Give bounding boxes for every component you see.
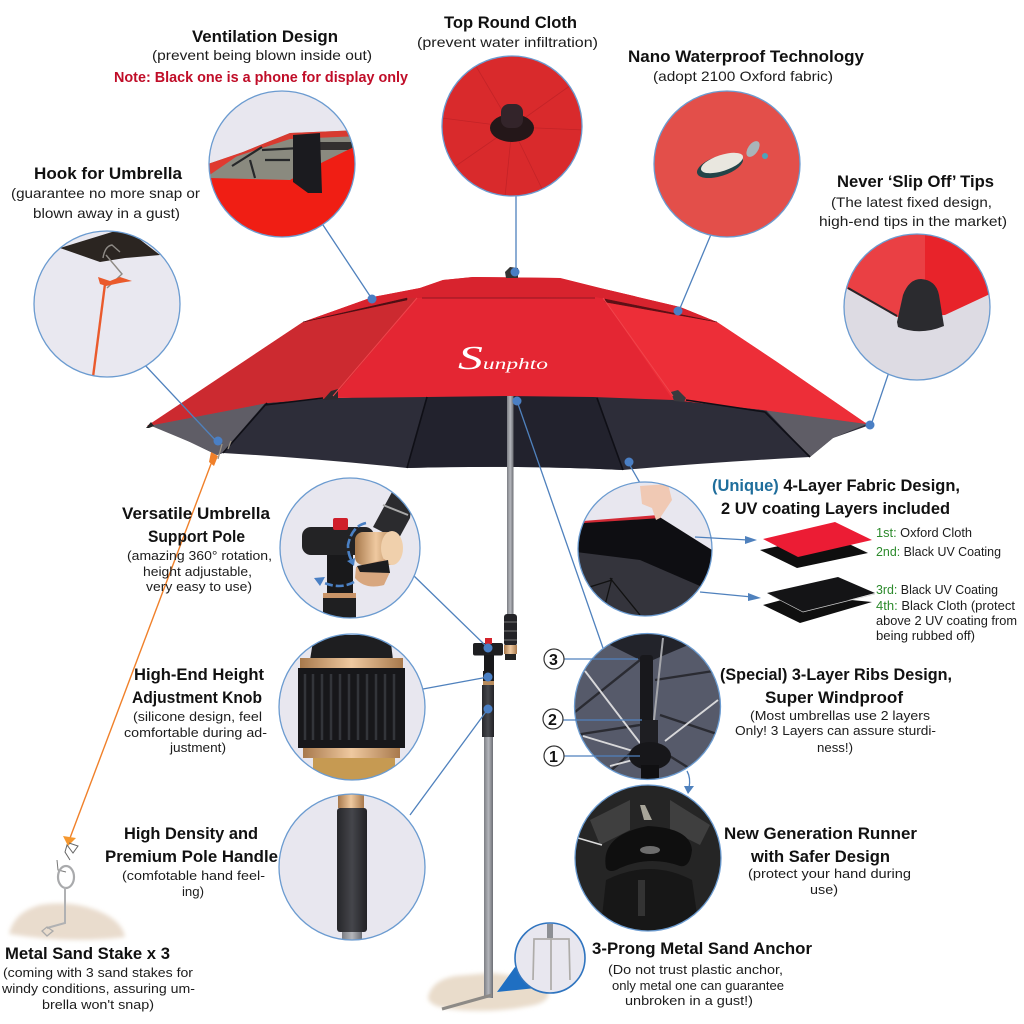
- text: nano waterproof technology: [628, 48, 865, 84]
- panel: ventilation detail: [210, 92, 354, 236]
- text: height adjustment knob: [124, 666, 267, 755]
- underside: centre panel: [407, 395, 623, 470]
- text: ribs design: Super Windproof: [765, 689, 904, 707]
- leader lines: [143, 196, 889, 815]
- panel: fabric layers photo: [575, 480, 715, 620]
- arrow: ribs to runner: [684, 771, 694, 794]
- upper pole: [507, 396, 514, 616]
- text: versatile support pole: (amazing 360° rotation,: [127, 549, 272, 563]
- text: nano waterproof technology: (adopt 2100 Oxford fabric): [653, 68, 833, 84]
- text: layer legend: 2nd: Black UV Coating: [876, 545, 1001, 559]
- lower pole: [484, 737, 493, 1000]
- stake hook on rib: [218, 441, 231, 459]
- panel: tip detail: [844, 234, 990, 380]
- height knob: [483, 671, 494, 683]
- arrow: orange rope from umbrella to stake: [63, 452, 218, 846]
- panel: pole handle detail: [280, 794, 424, 940]
- top cloth circle outline: [442, 56, 582, 196]
- text: runner: New Generation Runner: [724, 825, 918, 843]
- gold joint: [504, 645, 517, 654]
- text: 4-layer fabric design: [712, 477, 960, 518]
- callouts: rib numbers: 2: [548, 712, 557, 729]
- text: pole handle: Premium Pole Handle: [105, 848, 278, 866]
- text: versatile support pole: height adjustable,: [143, 565, 252, 579]
- underside: right grey panel: [765, 409, 867, 457]
- rib tips: [323, 389, 338, 400]
- callouts: rib numbers: 3: [549, 652, 558, 669]
- text: versatile support pole: [122, 505, 272, 594]
- panel: hook detail: [34, 232, 180, 376]
- panel: nano waterproof: [654, 92, 800, 236]
- text: hook for umbrella: (guarantee no more snap or: [11, 185, 200, 201]
- underside: dark fabric: [149, 393, 867, 470]
- text: height adjustment knob: Adjustment Knob: [132, 689, 262, 707]
- arrows to fabric layers: [695, 536, 761, 601]
- runner circle outline: [575, 785, 721, 931]
- text: versatile support pole: Versatile Umbrella: [122, 505, 271, 523]
- text: layer legend: [876, 526, 1017, 643]
- text: hook for umbrella: [11, 165, 200, 221]
- text: hook for umbrella: blown away in a gust): [33, 205, 180, 221]
- red canopy silhouette: [147, 277, 867, 426]
- text: ribs design: ness!): [817, 741, 853, 755]
- rib lines: [223, 397, 810, 470]
- text: ventilation design: [114, 28, 408, 86]
- text: layer legend: above 2 UV coating from: [876, 614, 1017, 628]
- text: layer legend: 1st: Oxford Cloth: [876, 526, 972, 540]
- text: layer legend: being rubbed off): [876, 629, 975, 643]
- panel: sand anchor detail: [515, 923, 585, 993]
- icon: anchor pointer: [497, 967, 536, 992]
- top vent cap: [303, 277, 717, 322]
- umbrella pole and mechanism: [473, 396, 517, 1000]
- text: top round cloth: (prevent water infiltration): [417, 34, 598, 50]
- handle circle outline: [279, 794, 425, 940]
- rib folds on red: [333, 298, 673, 396]
- text: ribs design: (Most umbrellas use 2 layers: [750, 709, 930, 723]
- text: top round cloth: [417, 14, 598, 50]
- diagram: four fabric layers: [760, 522, 875, 623]
- ribs circle outline: [574, 634, 720, 780]
- text: nano waterproof technology: Nano Waterproof Technology: [628, 48, 865, 66]
- sand mound with anchor: [428, 960, 549, 1011]
- text: height adjustment knob: comfortable during ad-: [124, 726, 267, 740]
- icon: sand stake: [9, 843, 125, 940]
- panel: support pole detail: [278, 476, 423, 622]
- tip circle outline: [844, 234, 990, 380]
- text: sand anchor: 3-Prong Metal Sand Anchor: [592, 940, 813, 958]
- text: sand stake: (coming with 3 sand stakes for: [3, 966, 193, 980]
- text: height adjustment knob: justment): [169, 741, 226, 755]
- vent slits: [303, 298, 407, 322]
- panel: top round cloth: [440, 55, 585, 200]
- text: never slip off tips: high-end tips in the market): [819, 213, 1007, 229]
- hook circle outline: [34, 231, 180, 377]
- text: layer legend: 4th: Black Cloth (protect: [876, 599, 1016, 613]
- umbrella canopy: [146, 267, 867, 470]
- text: layer legend: 3rd: Black UV Coating: [876, 583, 998, 597]
- text: top round cloth: Top Round Cloth: [444, 14, 577, 32]
- callouts: rib numbers: [543, 649, 642, 766]
- nano circle outline: [654, 91, 800, 237]
- top grip: [504, 614, 517, 646]
- panel: runner detail: [576, 786, 720, 930]
- fabric circle outline: [578, 482, 712, 616]
- text: runner: with Safer Design: [750, 848, 890, 866]
- text: ventilation design: (prevent being blown inside out): [152, 47, 372, 63]
- text: sand stake: Metal Sand Stake x 3: [5, 945, 170, 963]
- text: runner: [724, 825, 918, 897]
- ventilation circle outline: [209, 91, 355, 237]
- text: 4-layer fabric design: (Unique) 4-Layer Fabric Design,: [712, 477, 960, 495]
- callouts: rib numbers: 1: [549, 749, 558, 766]
- text: ribs design: [720, 666, 952, 755]
- text: hook for umbrella: Hook for Umbrella: [34, 165, 183, 183]
- text: pole handle: ing): [182, 885, 204, 899]
- text: height adjustment knob: High-End Height: [134, 666, 265, 684]
- brand logo: S unphto: [458, 340, 548, 377]
- text: never slip off tips: (The latest fixed design,: [831, 194, 992, 210]
- text: ventilation design: Ventilation Design: [192, 28, 338, 46]
- text: sand stake: brella won't snap): [42, 998, 154, 1012]
- text: 4-layer fabric design: 2 UV coating Layers included: [721, 500, 950, 518]
- text: sand anchor: unbroken in a gust!): [625, 994, 753, 1008]
- text: ribs design: (Special) 3-Layer Ribs Design,: [720, 666, 952, 684]
- text: sand anchor: (Do not trust plastic anchor,: [608, 963, 783, 977]
- text: ribs design: Only! 3 Layers can assure sturdi-: [735, 724, 936, 738]
- text: sand stake: windy conditions, assuring um-: [1, 982, 195, 996]
- text: runner: use): [810, 883, 838, 897]
- red canopy left side: [147, 297, 417, 426]
- text: pole handle: [105, 825, 278, 899]
- text: versatile support pole: very easy to use): [146, 580, 252, 594]
- text: versatile support pole: Support Pole: [148, 528, 245, 546]
- text: pole handle: High Density and: [124, 825, 258, 843]
- panel: knob detail: [280, 634, 424, 780]
- text: height adjustment knob: (silicone design, feel: [133, 710, 262, 724]
- pole handle: [482, 685, 494, 737]
- cross piece: [473, 643, 503, 656]
- support pole circle outline: [280, 478, 420, 618]
- underside: left grey panel: [149, 401, 267, 455]
- knob circle outline: [279, 634, 425, 780]
- text: runner: (protect your hand during: [748, 867, 911, 881]
- text: sand anchor: only metal one can guarantee: [612, 979, 784, 993]
- panel: ribs detail: [575, 634, 720, 779]
- text: never slip off tips: Never ‘Slip Off’ Tips: [837, 173, 994, 191]
- text: sand stake: [1, 945, 195, 1012]
- red canopy right side: [603, 298, 867, 424]
- text: pole handle: (comfotable hand feel-: [122, 869, 265, 883]
- text: ventilation design: Note: Black one is a phone for display only: [114, 70, 408, 86]
- text: sand anchor: [592, 940, 813, 1008]
- text: never slip off tips: [819, 173, 1007, 229]
